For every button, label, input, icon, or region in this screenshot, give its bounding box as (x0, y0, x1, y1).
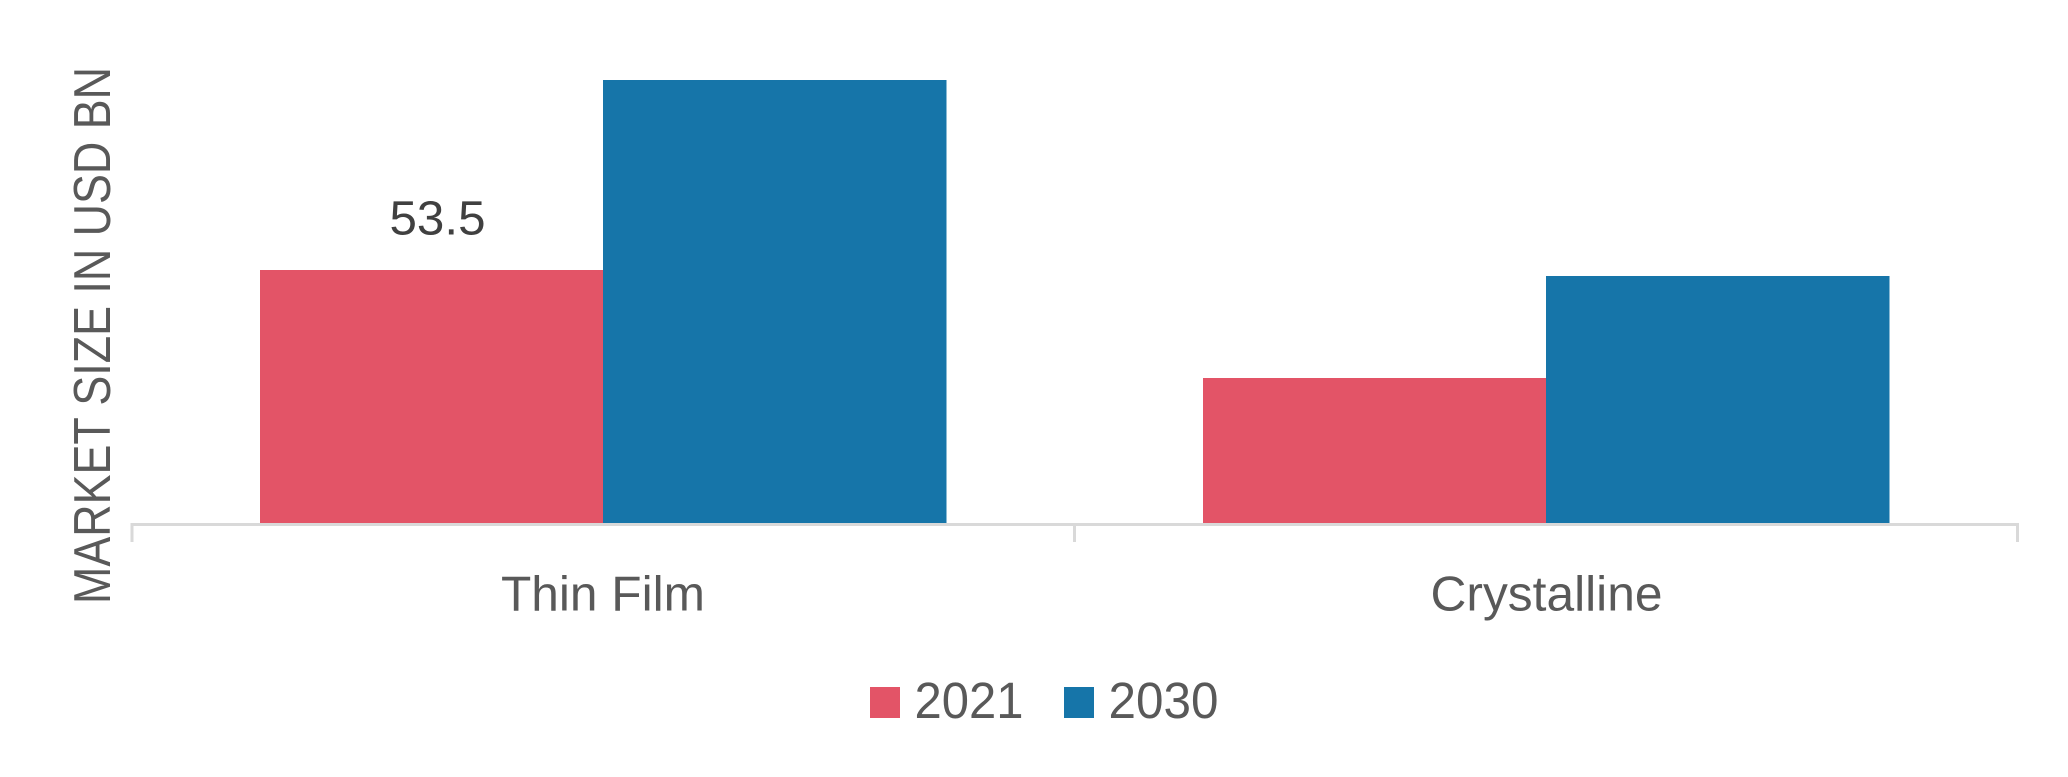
legend label: 2030: 2030 (1108, 672, 1218, 729)
bars: Thin Film (260, 80, 946, 523)
bar: Thin Film 2021 (260, 270, 603, 523)
x-axis with tick marks (132, 524, 2018, 542)
legend label: 2021: 2021 (914, 672, 1024, 729)
bar: Crystalline 2021 (1203, 378, 1546, 523)
category label: Crystalline: Crystalline (1430, 568, 1662, 622)
bar: Crystalline 2030 (1546, 276, 1890, 523)
data label: 53.5: 53.5 (390, 192, 486, 246)
legend swatch: 2030 (1064, 687, 1094, 718)
bar: Thin Film 2030 (603, 80, 946, 523)
bars: Crystalline (1203, 276, 1890, 523)
category label: Thin Film: Thin Film (501, 568, 705, 622)
legend (870, 672, 1218, 729)
legend swatch: 2021 (870, 687, 900, 718)
